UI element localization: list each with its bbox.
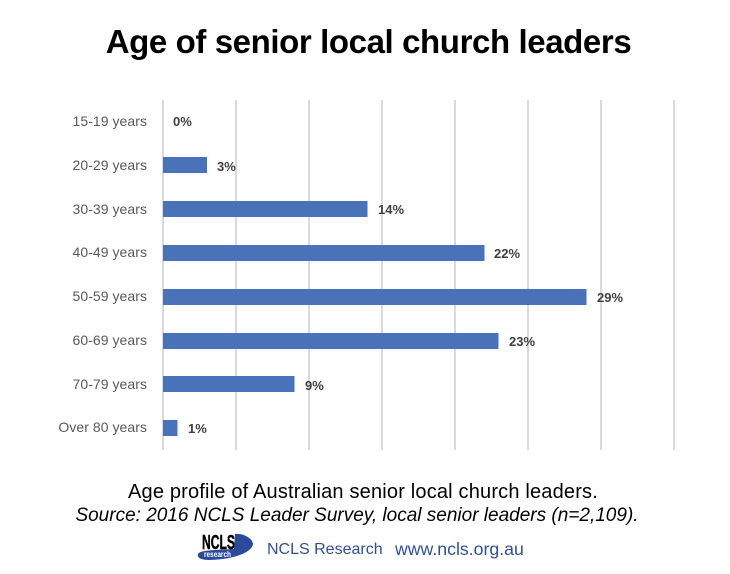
category labels bbox=[58, 113, 147, 435]
category labels: 30-39 years bbox=[73, 201, 147, 217]
category labels: Over 80 years bbox=[58, 419, 147, 435]
category labels: 20-29 years bbox=[73, 157, 147, 173]
category labels: 40-49 years bbox=[73, 244, 147, 260]
icon: NCLS logo: research bbox=[204, 550, 231, 559]
category labels: 70-79 years bbox=[73, 376, 147, 392]
footer: website: www.ncls.org.au bbox=[395, 539, 524, 559]
title: Age of senior local church leaders bbox=[106, 23, 631, 60]
footer: organisation name: NCLS Research bbox=[267, 541, 383, 558]
category labels: 60-69 years bbox=[73, 332, 147, 348]
caption: Age profile of Australian senior local church leaders. bbox=[128, 481, 598, 503]
value labels: 22% bbox=[494, 246, 520, 261]
source line: Source: 2016 NCLS Leader Survey, local senior leaders (n=2,109). bbox=[75, 505, 639, 526]
value labels: 29% bbox=[597, 290, 623, 305]
value labels: 0% bbox=[173, 114, 192, 129]
category labels: 15-19 years bbox=[73, 113, 147, 129]
bars bbox=[163, 157, 586, 436]
value labels: 1% bbox=[188, 421, 207, 436]
category labels: 50-59 years bbox=[73, 288, 147, 304]
value labels: 3% bbox=[217, 159, 236, 174]
value labels: 9% bbox=[305, 378, 324, 393]
value labels: 23% bbox=[509, 334, 535, 349]
value labels bbox=[173, 114, 623, 436]
value labels: 14% bbox=[378, 202, 404, 217]
